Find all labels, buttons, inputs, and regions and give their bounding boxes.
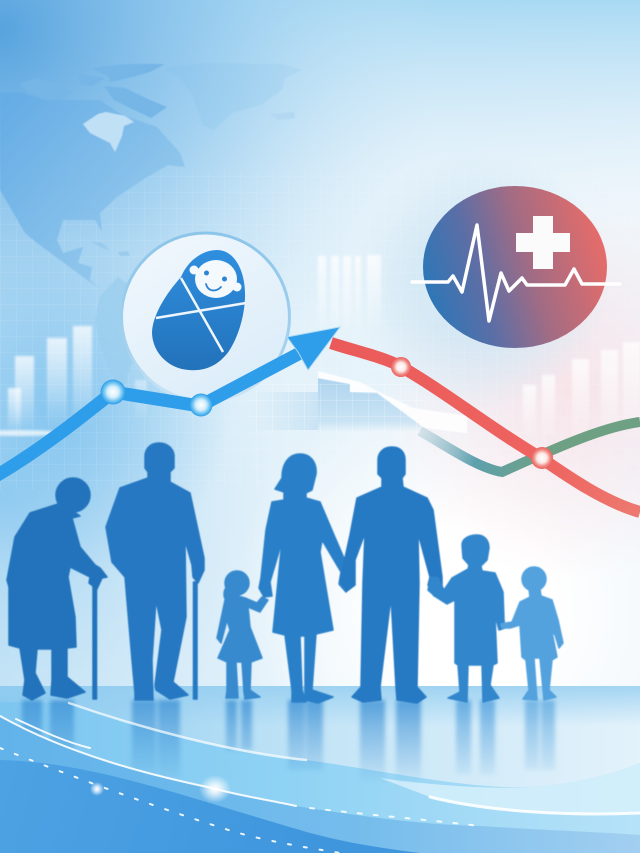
younger boy <box>501 567 563 700</box>
green trend line <box>420 422 640 472</box>
swaddle folds <box>156 278 246 352</box>
baby face <box>190 260 242 298</box>
wave: lower band <box>0 716 640 853</box>
blue trend arrow <box>0 327 340 476</box>
little girl <box>217 571 268 699</box>
map: greenland <box>163 63 302 130</box>
map: hudson bay <box>83 112 134 152</box>
background glow streak <box>0 430 60 436</box>
glare main <box>199 775 231 803</box>
medical cross <box>516 216 570 269</box>
red node lower <box>531 447 553 469</box>
red trend line <box>331 343 640 512</box>
red node upper <box>391 357 411 377</box>
background bars: right <box>523 342 640 445</box>
health oval <box>423 186 607 348</box>
map: iceland <box>270 112 295 120</box>
map: caribbean islands <box>90 241 130 256</box>
grandmother <box>7 478 107 700</box>
dotted orbit lines <box>0 748 480 853</box>
swaddle <box>152 250 245 370</box>
figure reflections <box>22 700 555 785</box>
map: south america <box>95 277 140 392</box>
blue node left <box>100 380 126 404</box>
mother <box>259 454 353 703</box>
background bars: center <box>318 255 381 336</box>
baby icon <box>122 233 290 401</box>
map: arctic islands <box>20 64 167 118</box>
world map <box>0 63 302 392</box>
wave: pale band <box>380 763 640 814</box>
father <box>340 447 442 703</box>
glare small <box>90 782 104 796</box>
arrowhead <box>287 327 340 370</box>
wave: deep blue area <box>0 760 420 853</box>
family silhouettes <box>7 443 563 703</box>
icon circle <box>122 233 290 401</box>
health icon <box>412 186 620 348</box>
blue node right <box>190 394 212 416</box>
white highlight curves <box>0 703 640 814</box>
grandfather <box>106 443 204 700</box>
ecg line <box>412 225 620 321</box>
wave: upper band <box>0 702 640 853</box>
older boy <box>428 535 505 702</box>
background bars: left <box>8 326 147 433</box>
floor <box>0 686 640 853</box>
map: north america <box>0 92 185 288</box>
stepped area chart <box>250 371 467 433</box>
